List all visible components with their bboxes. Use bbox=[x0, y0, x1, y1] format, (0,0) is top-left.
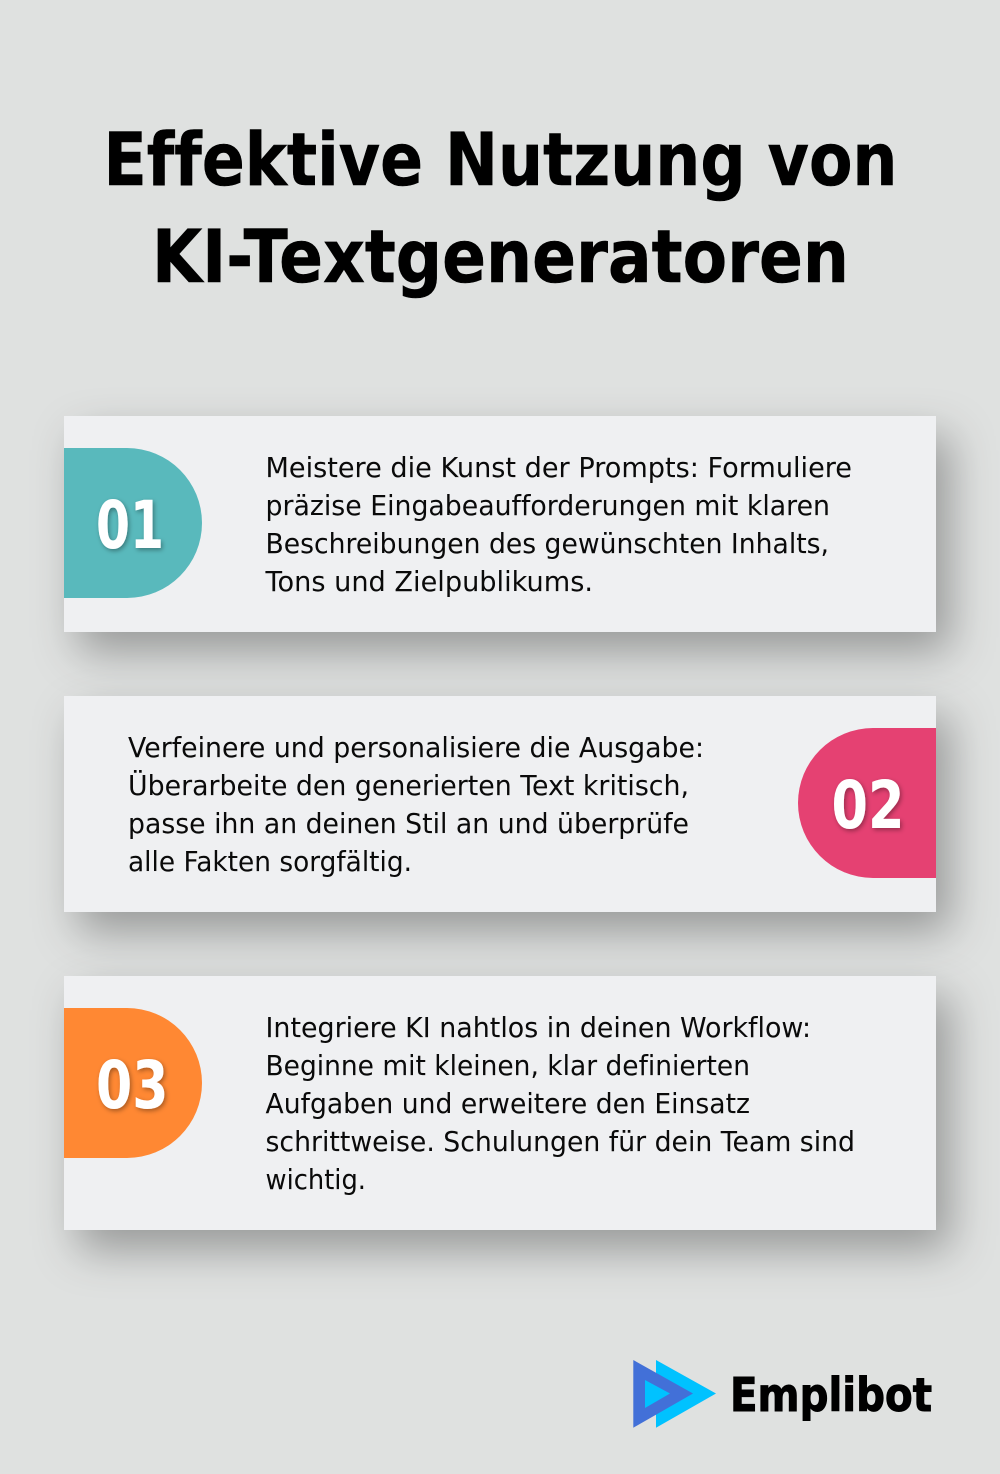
text block 01: Tons und Zielpublikums. bbox=[265, 565, 593, 598]
text block 01: präzise Eingabeaufforderungen mit klaren bbox=[266, 489, 830, 522]
text block 02: Überarbeite den generierten Text kritisch, bbox=[128, 768, 689, 802]
text block 02: alle Fakten sorgfältig. bbox=[128, 845, 412, 878]
number badge 02 bbox=[798, 728, 936, 878]
wordmark: Emplibot bbox=[730, 1368, 932, 1422]
panel: step 03 bbox=[64, 976, 936, 1230]
number badge 01 bbox=[64, 448, 202, 598]
text block 03: Aufgaben und erweitere den Einsatz bbox=[266, 1087, 750, 1120]
text block 02 bbox=[128, 731, 704, 878]
text block 01: Meistere die Kunst der Prompts: Formuliere bbox=[266, 451, 852, 484]
panel: step 01 bbox=[64, 416, 936, 632]
text block 03: wichtig. bbox=[266, 1163, 366, 1196]
text block 03: schrittweise. Schulungen für dein Team sind bbox=[266, 1125, 855, 1158]
title: KI-Textgeneratoren bbox=[152, 215, 849, 300]
number badge 03: 03 bbox=[96, 1047, 168, 1124]
text block 03 bbox=[266, 1011, 855, 1196]
text block 03: Integriere KI nahtlos in deinen Workflow: bbox=[266, 1011, 811, 1044]
number badge 02: 02 bbox=[832, 767, 904, 844]
card background 01 bbox=[64, 416, 936, 632]
title bbox=[104, 118, 898, 300]
text block 01: Beschreibungen des gewünschten Inhalts, bbox=[266, 527, 829, 560]
card background 03 bbox=[64, 976, 936, 1230]
text block 01 bbox=[265, 451, 852, 598]
text block 02: passe ihn an deinen Stil an und überprüfe bbox=[128, 807, 689, 840]
icon: play triangles bbox=[633, 1360, 716, 1428]
logo: Emplibot bbox=[633, 1360, 932, 1428]
text block 03: Beginne mit kleinen, klar definierten bbox=[266, 1049, 750, 1082]
number badge 01: 01 bbox=[96, 487, 164, 564]
title: Effektive Nutzung von bbox=[104, 118, 898, 203]
text block 02: Verfeinere und personalisiere die Ausgabe: bbox=[128, 731, 704, 764]
number badge 03 bbox=[64, 1008, 202, 1158]
card background 02 bbox=[64, 696, 936, 912]
panel: step 02 bbox=[64, 696, 936, 912]
